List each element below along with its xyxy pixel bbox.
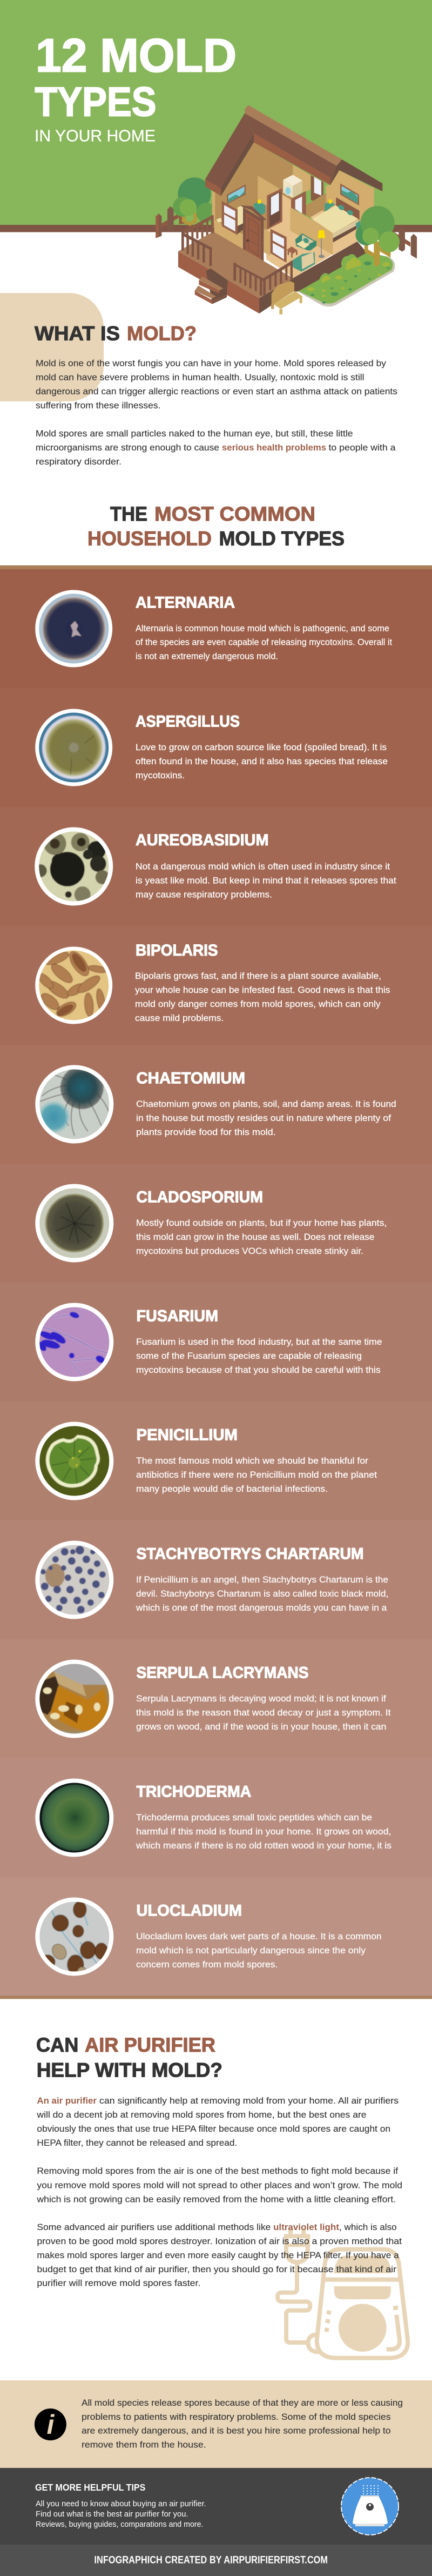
decorative beige blob <box>0 293 104 401</box>
heading: the most common household mold types <box>87 503 345 550</box>
photo: aureobasidium <box>34 827 113 906</box>
description: Mostly found outside on plants, but if your home has plants, <box>136 1218 387 1228</box>
description: is yeast like mold. But keep in mind that it releases spores that <box>136 876 396 885</box>
paragraph two: Mold spores are small particles naked to the human eye, but still, these little <box>36 429 353 439</box>
heading: PENICILLIUM <box>136 1426 238 1444</box>
paragraph one: HEPA filter, they cannot be released and spread. <box>37 2138 237 2148</box>
description: devil. Stachybotrys Chartarum is also called toxic black mold, <box>136 1589 388 1599</box>
paragraph two: to people with a <box>328 443 396 453</box>
hero: green background <box>0 0 432 225</box>
icon: air purifier badge <box>341 2478 399 2535</box>
front porch railing <box>233 261 293 296</box>
description: this mold is the reason that wood decay or just a symptom. It <box>136 1708 391 1718</box>
paragraph two: respiratory disorder. <box>36 457 122 467</box>
description: antibiotics if there were no Penicillium mold on the planet <box>136 1470 377 1480</box>
title: IN YOUR HOME <box>35 126 156 145</box>
paragraph one: can significantly help at removing mold from your home. All air purifiers <box>99 2096 399 2106</box>
description: often found in the house, and it also has species that release <box>136 757 388 766</box>
icon: info <box>35 2408 66 2440</box>
description: mold which is not particularly dangerous since the only <box>136 1946 366 1956</box>
callout text: All mold species release spores because of that they are more or less causing <box>82 2398 403 2408</box>
bottom stripe <box>0 1996 432 1999</box>
icon: info: i <box>46 2410 55 2440</box>
heading <box>36 2034 222 2081</box>
paragraph two <box>36 2166 402 2204</box>
hero: brown band <box>0 225 432 232</box>
heading: WHAT IS <box>35 323 120 345</box>
description <box>136 1813 392 1851</box>
panel: serpula lacrymans <box>0 1639 432 1758</box>
rear porch railing <box>181 215 214 239</box>
description: many people would die of bacterial infections. <box>136 1484 328 1494</box>
paragraph two: which is not growing can be easily removed from the home with a little cleaning effort. <box>36 2194 396 2204</box>
panel: alternaria <box>0 569 432 688</box>
left window <box>222 201 238 235</box>
photo: stachybotrys <box>35 1540 113 1619</box>
panel: bipolaris <box>0 926 432 1045</box>
paragraph three: budget to get that kind of air purifier, then you should go for it because that kind of air <box>37 2265 397 2274</box>
heading: the most common household mold types: MOLD TYPES <box>219 528 345 550</box>
heading: the most common household mold types: THE <box>110 503 147 525</box>
paragraph three: proven to be good mold spores destroyer. Ionization of air is also a proven method that <box>37 2237 402 2246</box>
photo: cladosporium <box>35 1184 113 1263</box>
description: mycotoxins because of that you should be careful with this <box>136 1365 381 1375</box>
paragraph one: suffering from these illnesses. <box>36 401 161 411</box>
armchair two <box>291 252 315 272</box>
coffee table <box>287 246 298 254</box>
panel: helpful tips <box>0 2468 432 2545</box>
description: Fusarium is used in the food industry, but at the same time <box>136 1337 382 1347</box>
right tree and fence <box>355 206 417 266</box>
paragraph two: serious health problems <box>222 443 326 453</box>
description <box>136 1932 382 1970</box>
photo: bipolaris <box>35 947 112 1024</box>
heading: the most common household mold types: MOST COMMON <box>154 503 315 525</box>
paragraph one <box>36 358 397 411</box>
heading: ASPERGILLUS <box>136 712 240 730</box>
section: can air purifier help <box>36 2034 402 2288</box>
footer credit: INFOGRAPHICH CREATED BY AIRPURIFIERFIRST.COM <box>94 2555 328 2566</box>
heading: HELP WITH MOLD? <box>37 2059 222 2081</box>
callout text <box>82 2398 403 2450</box>
photo: aspergillus <box>35 709 112 786</box>
photo: alternaria <box>35 590 112 667</box>
paragraph one: Mold is one of the worst fungis you can have in your home. Mold spores released by <box>36 358 387 368</box>
heading: MOLD? <box>127 323 197 345</box>
section: what is mold <box>35 323 397 467</box>
paragraph two: microorganisms are strong enough to cause <box>36 443 219 453</box>
heading <box>35 323 197 345</box>
left fence and tree <box>156 177 216 238</box>
roof <box>205 113 254 189</box>
nightstands <box>254 202 265 215</box>
foundation <box>293 242 367 291</box>
description: which means if there is no old rotten wood in your home, it is <box>136 1841 392 1851</box>
back door <box>311 175 323 201</box>
pictures on walls <box>227 184 246 204</box>
description <box>136 624 392 662</box>
photo: penicillium <box>35 1422 113 1500</box>
tips heading: GET MORE HELPFUL TIPS <box>35 2482 145 2493</box>
deck and stairs <box>178 231 293 298</box>
paragraph one: will do a decent job at removing mold spores from home, but the best ones are <box>36 2110 367 2120</box>
armchair one <box>295 233 316 250</box>
paragraph one: An air purifier <box>37 2096 97 2106</box>
left bed <box>238 205 243 226</box>
description: harmful if this mold is found in your home. It grows on wood, <box>136 1827 391 1837</box>
paragraph three: makes mold spores larger and even more easily caught by the HEPA filter. If you have a <box>37 2251 400 2260</box>
heading: ULOCLADIUM <box>136 1901 242 1919</box>
description: mycotoxins but produces VOCs which create stinky air. <box>136 1246 363 1256</box>
callout text: are extremely dangerous, and it is best you hire some professional help to <box>82 2426 391 2435</box>
panel: trichoderma <box>0 1758 432 1877</box>
description: Not a dangerous mold which is often used in industry since it <box>136 862 390 871</box>
description: in the house but mostly resides out in nature where plenty of <box>136 1113 391 1123</box>
callout: beige band <box>0 2380 432 2468</box>
paragraph three: Some advanced air purifiers use additional methods like <box>37 2223 271 2232</box>
callout text: remove them from the house. <box>82 2440 206 2450</box>
paragraph one: mold can have severe problems in human health. Usually, nontoxic mold is still <box>36 372 364 382</box>
description <box>136 862 396 899</box>
description <box>135 971 390 1023</box>
description <box>136 1694 391 1732</box>
paragraph one: obviously the ones that use true HEPA filter because once mold spores are caught on <box>37 2124 390 2134</box>
description: of the species are even capable of releasing mycotoxins. Overall it <box>136 638 392 648</box>
paragraph three: , which is also <box>339 2223 397 2232</box>
description: mold only danger comes from mold spores, which can only <box>135 999 381 1009</box>
photo: trichoderma <box>35 1778 113 1857</box>
paragraph three <box>37 2223 402 2288</box>
paragraph two: Removing mold spores from the air is one of the best methods to fight mold because if <box>37 2166 398 2176</box>
bed <box>336 197 360 220</box>
photo: chaetomium <box>35 1065 113 1144</box>
description <box>136 1218 387 1256</box>
description: may cause respiratory problems. <box>136 890 272 899</box>
description <box>136 1099 396 1137</box>
photo: serpula <box>35 1659 113 1738</box>
panel: fusarium <box>0 1283 432 1402</box>
description: Trichoderma produces small toxic peptides which can be <box>136 1813 372 1823</box>
heading: AIR PURIFIER <box>85 2034 215 2056</box>
description <box>136 1575 388 1613</box>
description: your whole house can be infested fast. Good news is that this <box>135 985 390 995</box>
description: Love to grow on carbon source like food (spoiled bread). It is <box>136 743 387 752</box>
heading: FUSARIUM <box>136 1307 218 1325</box>
panel: cladosporium <box>0 1164 432 1283</box>
paragraph three: ultraviolet light <box>273 2223 340 2232</box>
description <box>136 1337 382 1375</box>
tips text: Reviews, buying guides, comparations and more. <box>36 2520 203 2529</box>
description: Bipolaris grows fast, and if there is a plant source available, <box>135 971 381 981</box>
description: Serpula Lacrymans is decaying wood mold; it is not known if <box>136 1694 386 1704</box>
front window <box>271 229 287 263</box>
panel: aspergillus <box>0 688 432 807</box>
illustration: isometric house <box>156 105 417 315</box>
panel: chaetomium <box>0 1045 432 1164</box>
heading: the most common household mold types: HOUSEHOLD <box>87 528 212 550</box>
paragraph two <box>36 429 396 467</box>
tips text: Find out what is the best air purifier for you. <box>36 2510 188 2519</box>
inner door <box>291 191 306 215</box>
heading: AUREOBASIDIUM <box>136 831 269 849</box>
title: TYPES <box>35 79 157 125</box>
description: which is one of the most dangerous molds you can have in a <box>136 1603 387 1613</box>
heading: CLADOSPORIUM <box>136 1188 263 1206</box>
description: grows on wood, and if the wood is in your house, then it can <box>136 1722 386 1732</box>
heading: CHAETOMIUM <box>136 1069 245 1087</box>
paragraph two: you remove mold spores mold will not spread to other places and won’t grow. The mold <box>37 2180 402 2190</box>
description: mycotoxins. <box>136 771 185 780</box>
heading: ALTERNARIA <box>136 593 235 611</box>
walls <box>212 142 293 242</box>
icon: air purifier watermark <box>278 2228 408 2358</box>
bushes <box>341 254 361 271</box>
description: Chaetomium grows on plants, soil, and damp areas. It is found <box>136 1099 396 1109</box>
paragraph three: purifier will remove mold spores faster. <box>37 2279 200 2288</box>
washer <box>283 175 302 186</box>
heading: CAN <box>36 2034 78 2056</box>
description: concern comes from mold spores. <box>136 1960 278 1970</box>
description: Alternaria is common house mold which is pathogenic, and some <box>136 624 389 633</box>
title <box>35 30 237 145</box>
front door <box>243 207 264 264</box>
heading: SERPULA LACRYMANS <box>136 1664 309 1681</box>
heading: TRICHODERMA <box>136 1783 251 1800</box>
description: some of the Fusarium species are capable of releasing <box>136 1351 362 1361</box>
description: cause mild problems. <box>135 1013 224 1023</box>
heading: BIPOLARIS <box>136 942 218 959</box>
description <box>136 1456 377 1494</box>
photo: ulocladium <box>35 1897 113 1982</box>
description: is not an extremely dangerous mold. <box>136 652 278 662</box>
footer <box>0 2545 432 2576</box>
heading: STACHYBOTRYS CHARTARUM <box>136 1545 364 1563</box>
panel: penicillium <box>0 1402 432 1520</box>
paragraph one: dangerous and can trigger allergic reactions or even start an asthma attack on patients <box>36 386 397 396</box>
top stripe <box>0 565 432 569</box>
description: Ulocladium loves dark wet parts of a house. It is a common <box>136 1932 382 1941</box>
grass <box>298 252 395 306</box>
photo: fusarium <box>35 1303 113 1382</box>
panel: stachybotrys chartarum <box>0 1520 432 1639</box>
panel: aureobasidium <box>0 807 432 926</box>
panel: ulocladium <box>0 1877 432 1996</box>
bench <box>272 281 294 305</box>
floor lamp <box>319 255 325 258</box>
callout text: problems to patients with respiratory problems. Some of the mold species <box>82 2412 391 2422</box>
description: this mold can grow in the house as well. Does not release <box>136 1232 374 1242</box>
title: 12 MOLD <box>36 30 237 82</box>
paragraph one <box>36 2096 399 2148</box>
description <box>136 743 388 780</box>
tips text <box>36 2500 206 2529</box>
description: If Penicillium is an angel, then Stachybotrys Chartarum is the <box>136 1575 388 1585</box>
front-left porch railing <box>181 231 212 266</box>
description: The most famous mold which we should be thankful for <box>136 1456 369 1466</box>
middle door <box>267 188 282 230</box>
tips text: All you need to know about buying an air purifier. <box>36 2500 206 2508</box>
description: plants provide food for this mold. <box>136 1127 276 1137</box>
